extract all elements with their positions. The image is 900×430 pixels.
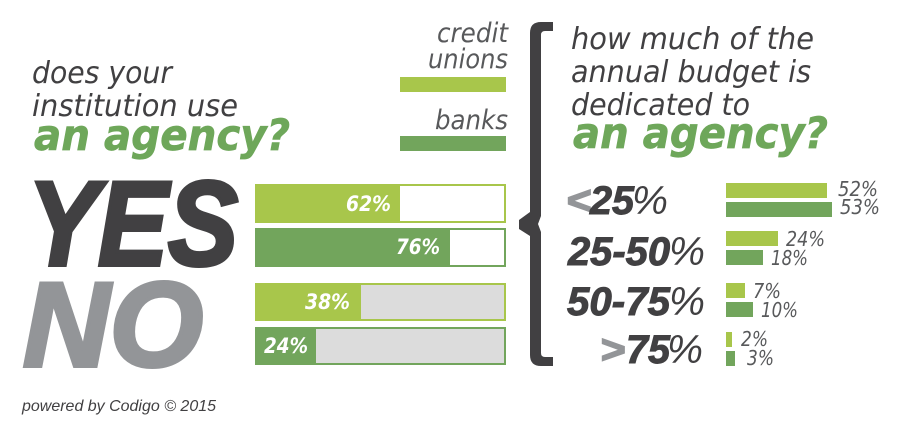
range row: 25-50%: 24% (786, 227, 825, 251)
range row: over 75%: 75 (626, 328, 671, 372)
legend: unions (428, 44, 508, 75)
bar: yes banks 76% (255, 228, 505, 267)
range row: 25-50%: 25-50 (567, 230, 670, 274)
range row: 50-75% (567, 279, 798, 324)
range row: 25-50%: 18% (771, 246, 808, 270)
bar: yes credit unions 62%: 62% (346, 192, 391, 216)
bar: yes credit unions 62% (255, 184, 505, 223)
range row: 50-75%: 7% (753, 279, 781, 303)
range row: over 75%: > (600, 328, 625, 372)
range row: under 25%: % (632, 179, 668, 223)
range row: over 75%: % (667, 328, 703, 372)
range row: under 25% (566, 177, 880, 223)
NO label: NO (23, 258, 203, 392)
right question heading: annual budget is (571, 55, 811, 90)
right question heading: how much of the (571, 22, 814, 57)
range row: over 75% (600, 327, 774, 372)
left question heading (32, 56, 290, 161)
range row: 50-75%: 10% (761, 298, 798, 322)
bar: no banks 24%: 24% (264, 334, 308, 358)
range row: 50-75%: 50-75 (567, 280, 671, 324)
legend (400, 18, 509, 151)
legend: banks (435, 105, 508, 136)
bar: no banks 24% (255, 327, 505, 365)
legend: credit (437, 18, 509, 49)
range row: under 25%: 25 (589, 179, 635, 223)
left question heading: does your (32, 56, 174, 91)
bar: no credit unions 38% (255, 283, 505, 321)
credit line: powered by Codigo © 2015 (21, 398, 216, 415)
curly brace (519, 22, 553, 366)
left question heading: institution use (32, 89, 238, 124)
range row: under 25%: 52% (838, 177, 878, 201)
bar: yes banks 76%: 76% (396, 235, 440, 259)
bar: no credit unions 38%: 38% (305, 290, 350, 314)
right question heading: an agency? (573, 109, 828, 159)
left question heading: an agency? (34, 111, 290, 161)
range row: over 75%: 3% (747, 346, 774, 370)
right question heading (571, 22, 828, 159)
range row: under 25%: < (566, 179, 591, 223)
range row: 50-75%: % (669, 280, 705, 324)
range row: 25-50% (567, 227, 825, 274)
range row: under 25%: 53% (840, 195, 880, 219)
YES label: YES (28, 157, 238, 291)
range row: 25-50%: % (669, 230, 705, 274)
right question heading: dedicated to (571, 88, 750, 123)
range row: over 75%: 2% (741, 327, 768, 351)
